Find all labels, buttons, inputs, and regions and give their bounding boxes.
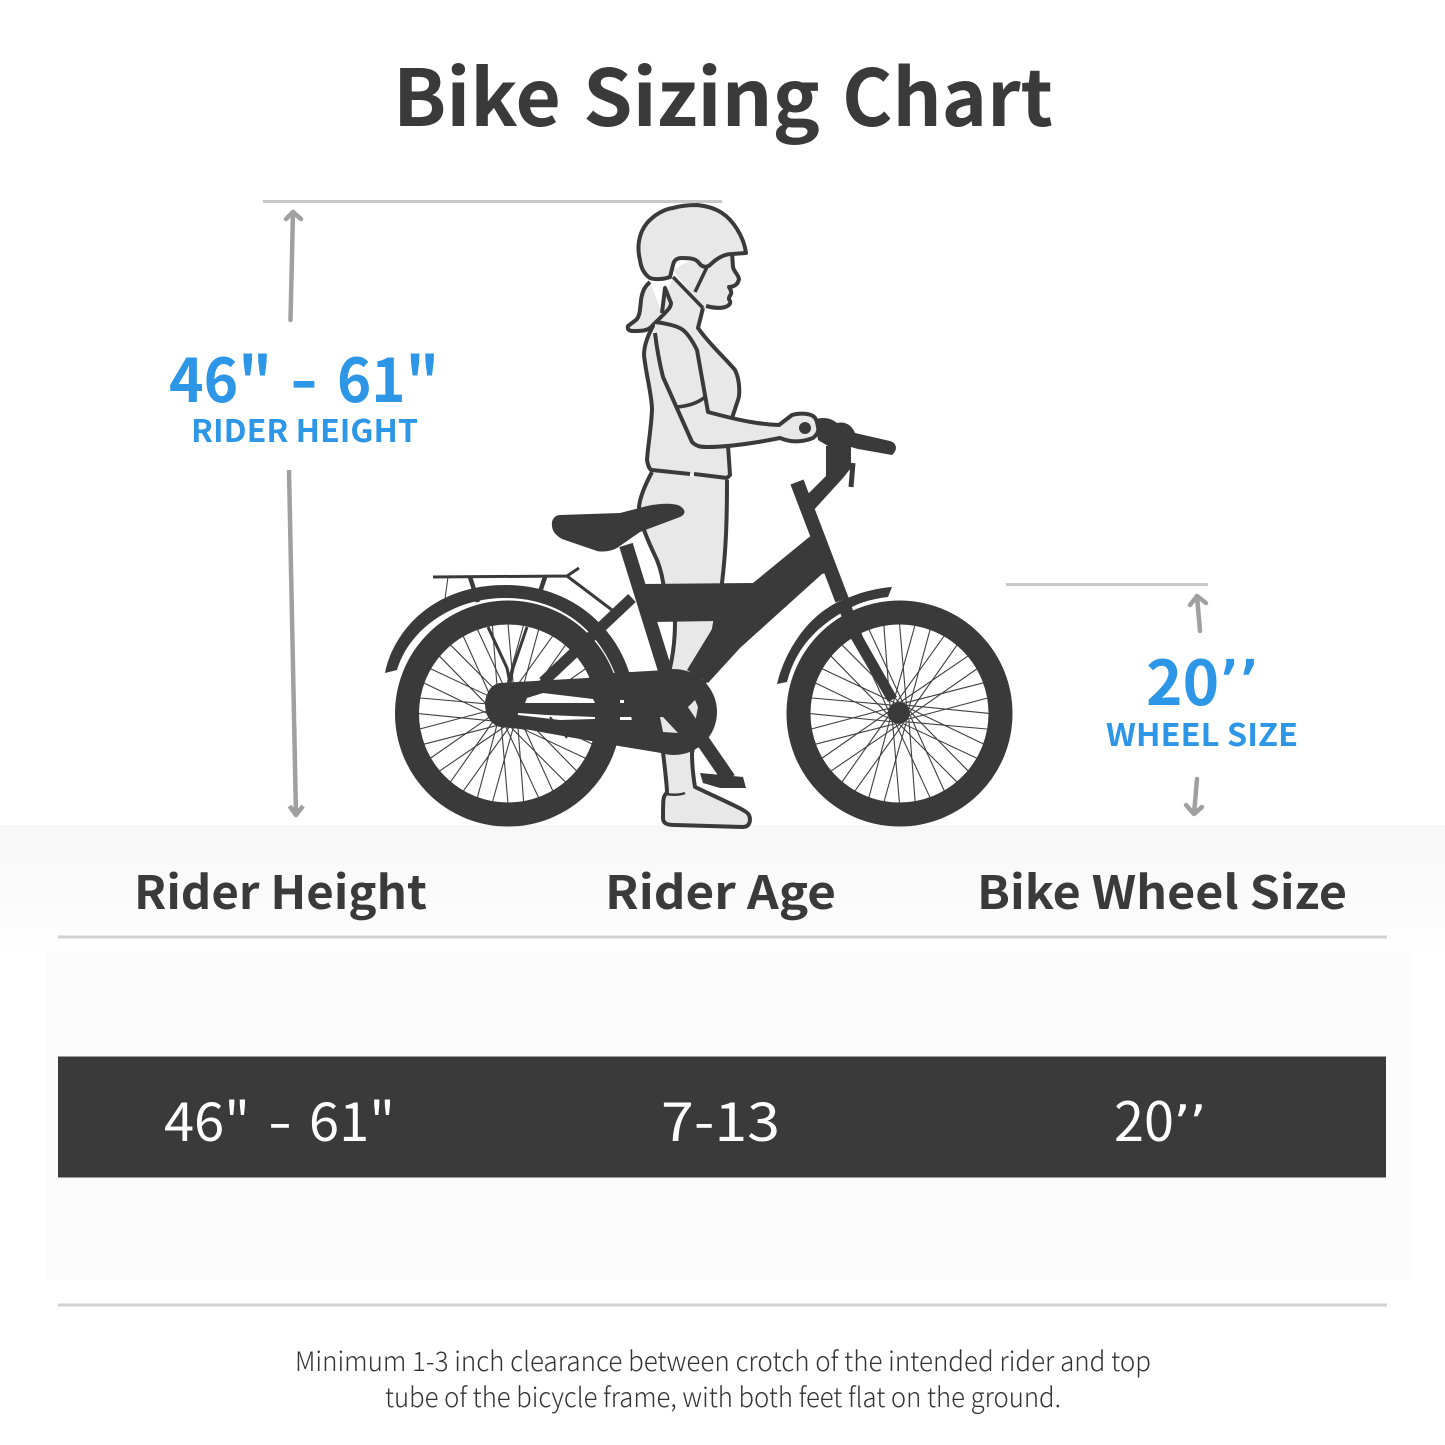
kickstand	[550, 717, 567, 738]
header: rider age: Rider Age	[605, 857, 836, 923]
wheel size measure	[1006, 584, 1298, 814]
rear rack	[433, 568, 612, 610]
front fender	[777, 587, 892, 684]
helmet strap	[673, 267, 707, 308]
rider height value	[169, 330, 439, 420]
wheel size value: 20’’	[1146, 633, 1259, 723]
rider ponytail	[628, 282, 671, 331]
footnote: tube of the bicycle frame, with both feet flat on the ground.	[385, 1376, 1061, 1415]
rear wheel	[395, 608, 621, 819]
brake lever	[851, 463, 853, 487]
rider height value: 61"	[337, 330, 439, 420]
illustration: rider with bike	[385, 205, 1012, 827]
sleeve hem	[677, 397, 705, 407]
title: Bike	[393, 37, 561, 149]
bike frame	[626, 446, 897, 702]
rider height value: 46"	[169, 330, 272, 420]
helmet	[638, 205, 746, 279]
rear fender	[385, 585, 630, 679]
rider arm	[655, 322, 818, 447]
chain guard and chainring	[485, 669, 717, 755]
footnote: Minimum 1-3 inch clearance between crotch of the intended rider and top	[295, 1340, 1151, 1379]
front wheel	[787, 608, 1012, 819]
arrow: wheel size down	[1186, 779, 1202, 814]
title	[393, 37, 1053, 149]
header: rider height: Rider Height	[134, 857, 427, 923]
rider legs	[639, 472, 750, 827]
table data row	[58, 1056, 1386, 1178]
value: wheel size: 20’’	[1114, 1078, 1206, 1157]
crank and pedal	[680, 708, 746, 788]
rider height measure	[169, 202, 722, 815]
arrow: rider height up	[286, 212, 301, 320]
saddle	[552, 504, 684, 552]
arrow: wheel size up	[1190, 596, 1206, 631]
value: age: 7-13	[661, 1078, 780, 1157]
value: height: 61"	[309, 1078, 395, 1157]
value: height: 46"	[164, 1078, 250, 1157]
rider height value: -	[290, 330, 318, 420]
footnote	[295, 1340, 1151, 1415]
rider torso	[644, 277, 739, 478]
value: height: -	[268, 1078, 292, 1157]
arrow: rider height down	[289, 470, 303, 815]
title: Sizing	[583, 37, 820, 149]
table header row	[134, 857, 1347, 923]
value: height	[164, 1078, 395, 1157]
rider height label: RIDER HEIGHT	[191, 406, 418, 451]
ankle cuff	[665, 793, 685, 795]
rear stays	[488, 627, 527, 683]
hand dot	[799, 422, 811, 434]
handlebar	[815, 418, 896, 455]
wheel size label: WHEEL SIZE	[1106, 710, 1298, 755]
header: bike wheel size: Bike Wheel Size	[977, 857, 1347, 923]
rider face	[673, 250, 739, 308]
title: Chart	[842, 37, 1053, 149]
